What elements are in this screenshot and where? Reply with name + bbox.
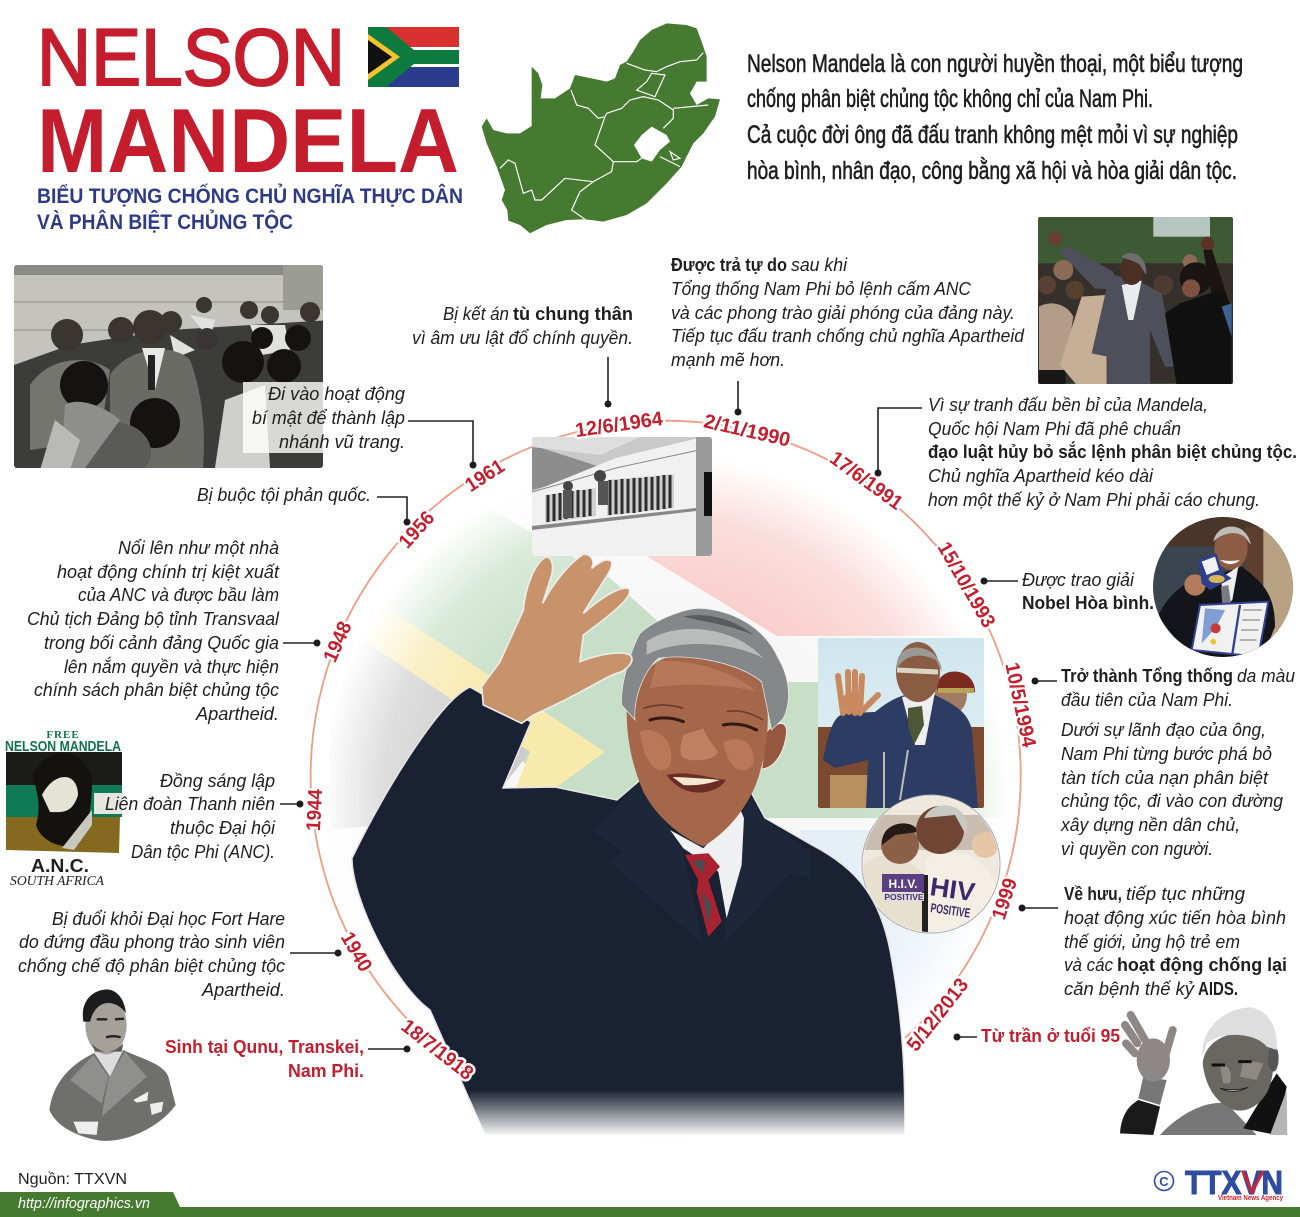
hand — [482, 554, 632, 723]
dates along the arc: 18/7/1918 — [397, 1015, 477, 1085]
text: 1991: Quốc hội Nam Phi đã phê chuẩn — [928, 418, 1181, 439]
text: 1991: Chủ nghĩa Apartheid kéo dài — [928, 465, 1154, 486]
text: 1918 birth: Sinh tại Qunu, Transkei, — [165, 1037, 364, 1057]
text: 1994 president: tàn tích của nạn phân biệt — [1061, 767, 1269, 788]
text: 1940: do đứng đầu phong trào sinh viên — [19, 931, 285, 952]
photo: Mandela sworn in as president — [818, 638, 984, 808]
dates along the arc: 1961 — [461, 455, 509, 497]
tie — [685, 853, 722, 937]
text: 1999 retirement: và các — [1064, 954, 1114, 975]
photo: Mandela HIV positive — [860, 795, 1002, 935]
text: 1999 retirement: AIDS. — [1198, 979, 1238, 999]
logo: TTXVN: C — [1159, 1174, 1169, 1189]
text: 1961 underground: bí mật để thành lập — [252, 407, 405, 428]
text: 1991 — [928, 394, 1297, 510]
text: 1991: hơn một thế kỷ ở Nam Phi phải cáo chung. — [928, 489, 1260, 510]
dates along the arc: 5/12/2013 — [903, 974, 973, 1056]
text: 1990 freed: Được trả tự do — [671, 255, 787, 275]
text: 1994 president: Nam Phi từng bước phá bỏ — [1061, 743, 1272, 764]
main figure: Nelson Mandela waving — [352, 554, 920, 1137]
text: 1948: chính sách phân biệt chủng tộc — [34, 679, 280, 700]
text: 1999 retirement: căn bệnh thế kỷ — [1064, 978, 1196, 999]
text: 1961 underground — [252, 383, 406, 452]
text: 1990 freed: mạnh mẽ hơn. — [671, 349, 785, 370]
dates along the arc: 12/6/1964 — [574, 408, 665, 442]
text: 1994 president: da màu — [1237, 665, 1295, 686]
title: Nelson Mandela — [37, 13, 459, 192]
eyes — [650, 718, 757, 730]
text: 1964 life sentence: tù chung thân — [513, 304, 633, 324]
photo: Nobel Peace Prize — [1153, 517, 1293, 657]
text: 1918 birth: Nam Phi. — [288, 1061, 364, 1081]
footer bar: http://infographics.vn — [18, 1196, 150, 1212]
dates along the arc: 15/10/1993 — [933, 538, 999, 632]
text: 1999 retirement — [1064, 883, 1287, 999]
dates along the arc: 1956 — [395, 507, 439, 553]
text: 1948: của ANC và được bầu làm — [78, 584, 279, 605]
text: 1999 retirement: thế giới, ủng hộ trẻ em — [1064, 931, 1240, 952]
connector lines and dots — [280, 357, 1058, 1052]
text: 1994 president: Dưới sự lãnh đạo của ông, — [1061, 719, 1266, 740]
ear — [762, 724, 787, 769]
text: 1994 president — [1060, 665, 1295, 859]
text: 1944: thuộc Đại hội — [170, 817, 276, 838]
dates along the arc: 1944 — [303, 788, 327, 832]
text: 1940: chống chế độ phân biệt chủng tộc — [18, 955, 286, 976]
text: 1948: trong bối cảnh đảng Quốc gia — [44, 632, 279, 653]
footer bar — [0, 1192, 1300, 1217]
text: 1993 Nobel — [1022, 569, 1154, 613]
photo: prison train 1964 — [532, 437, 712, 557]
text: 1991: Vì sự tranh đấu bền bỉ của Mandela, — [928, 394, 1208, 415]
text: 1999 retirement: Về hưu, — [1064, 884, 1122, 904]
map of South Africa — [482, 23, 720, 233]
text: 1944: Liên đoàn Thanh niên — [105, 793, 275, 814]
nose — [680, 728, 718, 760]
shirt — [670, 808, 744, 918]
dates along the arc: 1940 — [336, 928, 376, 976]
text: 1961 underground: nhánh vũ trang. — [279, 431, 405, 452]
text: 1940: Bị đuổi khỏi Đại học Fort Hare — [52, 908, 285, 929]
bottom fade — [470, 1090, 920, 1137]
text: 1948: Chủ tịch Đảng bộ tỉnh Transvaal — [27, 608, 280, 629]
text: 1948: Apartheid. — [195, 703, 279, 724]
face — [627, 655, 768, 847]
text: 1999 retirement: tiếp tục những — [1126, 883, 1246, 904]
photo: Mandela HIV positive: POSITIVE — [930, 900, 971, 921]
text: 1944: Đồng sáng lập — [160, 770, 275, 791]
photo: Mandela HIV positive: POSITIVE — [884, 892, 924, 902]
text: 1990 freed: Tiếp tục đấu tranh chống chủ nghĩa Apartheid — [671, 325, 1025, 346]
text: 1994 president: vì quyền con người. — [1061, 838, 1213, 859]
logo: TTXVN: Vietnam News Agency — [1218, 1195, 1283, 1202]
text: 1994 president: Trở thành Tổng thống — [1061, 666, 1233, 686]
dates along the arc: 2/11/1990 — [702, 410, 792, 452]
dates along the arc: 1948 — [319, 618, 357, 666]
title: Nelson Mandela: MANDELA — [37, 91, 459, 192]
text: 1964 life sentence: vì âm ưu lật đổ chính quyền. — [412, 327, 633, 348]
text: 1948: Nổi lên như một nhà — [118, 537, 279, 558]
text: 1993 Nobel: Nobel Hòa bình. — [1022, 593, 1154, 613]
icon: South African flag — [368, 27, 459, 87]
intro paragraph — [747, 50, 1243, 185]
text: 1964 life sentence: Bị kết án — [443, 303, 509, 324]
dates along the arc: 1999 — [988, 876, 1022, 922]
dates along the arc: 17/6/1991 — [826, 447, 906, 515]
text: 1940 — [18, 908, 286, 1000]
text: 1994 president: đầu tiên của Nam Phi. — [1061, 689, 1233, 710]
subtitle: BIỂU TƯỢNG CHỐNG CHỦ NGHĨA THỰC DÂN — [37, 184, 463, 208]
head, hand and collar — [482, 554, 810, 945]
text: 1944: Dân tộc Phi (ANC). — [131, 841, 275, 862]
title: Nelson Mandela: NELSON — [37, 13, 345, 103]
text: 1990 freed: Tổng thống Nam Phi bỏ lệnh cấm ANC — [671, 278, 972, 299]
photo: Mandela HIV positive: HIV — [928, 871, 978, 907]
text: 1993 Nobel: Được trao giải — [1022, 569, 1135, 590]
text: 1948: lên nắm quyền và thực hiện — [64, 656, 279, 677]
poster: Free Nelson Mandela ANC: A.N.C. — [31, 856, 89, 876]
text: 1999 retirement: hoạt động chống lại — [1117, 955, 1287, 975]
right lapel — [723, 798, 810, 945]
text: 2013 death: Từ trần ở tuổi 95 — [981, 1026, 1120, 1046]
photo: elderly Mandela waving — [1120, 1007, 1287, 1135]
text: 1961 underground: Đi vào hoạt động — [268, 383, 406, 404]
text: 1990 freed: và các phong trào giải phóng của đảng này. — [671, 302, 1015, 323]
dates along the arc — [303, 408, 1040, 1085]
smile — [667, 773, 726, 792]
timeline arc — [311, 421, 1021, 1087]
coat — [352, 687, 905, 1135]
subtitle — [37, 184, 463, 234]
text: 1940: Apartheid. — [201, 979, 285, 1000]
photo: release from prison 1990 — [1037, 215, 1237, 388]
left lapel — [593, 783, 703, 945]
text: 1964 life sentence — [412, 303, 633, 348]
photo: Mandela HIV positive: H.I.V. — [889, 877, 917, 891]
poster: Free Nelson Mandela ANC: NELSON MANDELA — [5, 738, 121, 755]
logo: TTXVN: TTXVN — [1185, 1164, 1283, 1201]
text: 1948: hoạt động chính trị kiệt xuất — [57, 561, 280, 582]
poster: Free Nelson Mandela ANC: FREE — [46, 729, 80, 741]
photo: young Mandela portrait — [49, 989, 176, 1141]
text: 1918 birth — [165, 1037, 364, 1081]
dates along the arc: 10/5/1994 — [1000, 661, 1040, 750]
text: 1944 — [105, 770, 276, 862]
poster: Free Nelson Mandela ANC — [5, 729, 122, 889]
text: 1948 — [27, 537, 280, 724]
photo: 1950s crowd with Mandela — [14, 265, 330, 482]
text: 1956 treason: Bị buộc tội phản quốc. — [197, 484, 371, 505]
subtitle: VÀ PHÂN BIỆT CHỦNG TỘC — [37, 210, 293, 234]
hair — [622, 608, 789, 730]
text: 1994 president: xây dựng nền dân chủ, — [1060, 814, 1240, 835]
logo: TTXVN — [1154, 1164, 1283, 1202]
text: 1990 freed — [671, 254, 1025, 370]
intro paragraph: chống phân biệt chủng tộc không chỉ của Nam Phi. — [747, 85, 1153, 113]
poster: Free Nelson Mandela ANC: SOUTH AFRICA — [10, 874, 104, 889]
text: 1990 freed: sau khi — [791, 254, 848, 275]
source: Nguồn: TTXVN — [18, 1171, 127, 1188]
text: 1994 president: chủng tộc, đi vào con đường — [1061, 790, 1284, 811]
text: 1999 retirement: hoạt động xúc tiến hòa bình — [1064, 907, 1286, 928]
background: faded flag disc — [336, 473, 996, 1009]
